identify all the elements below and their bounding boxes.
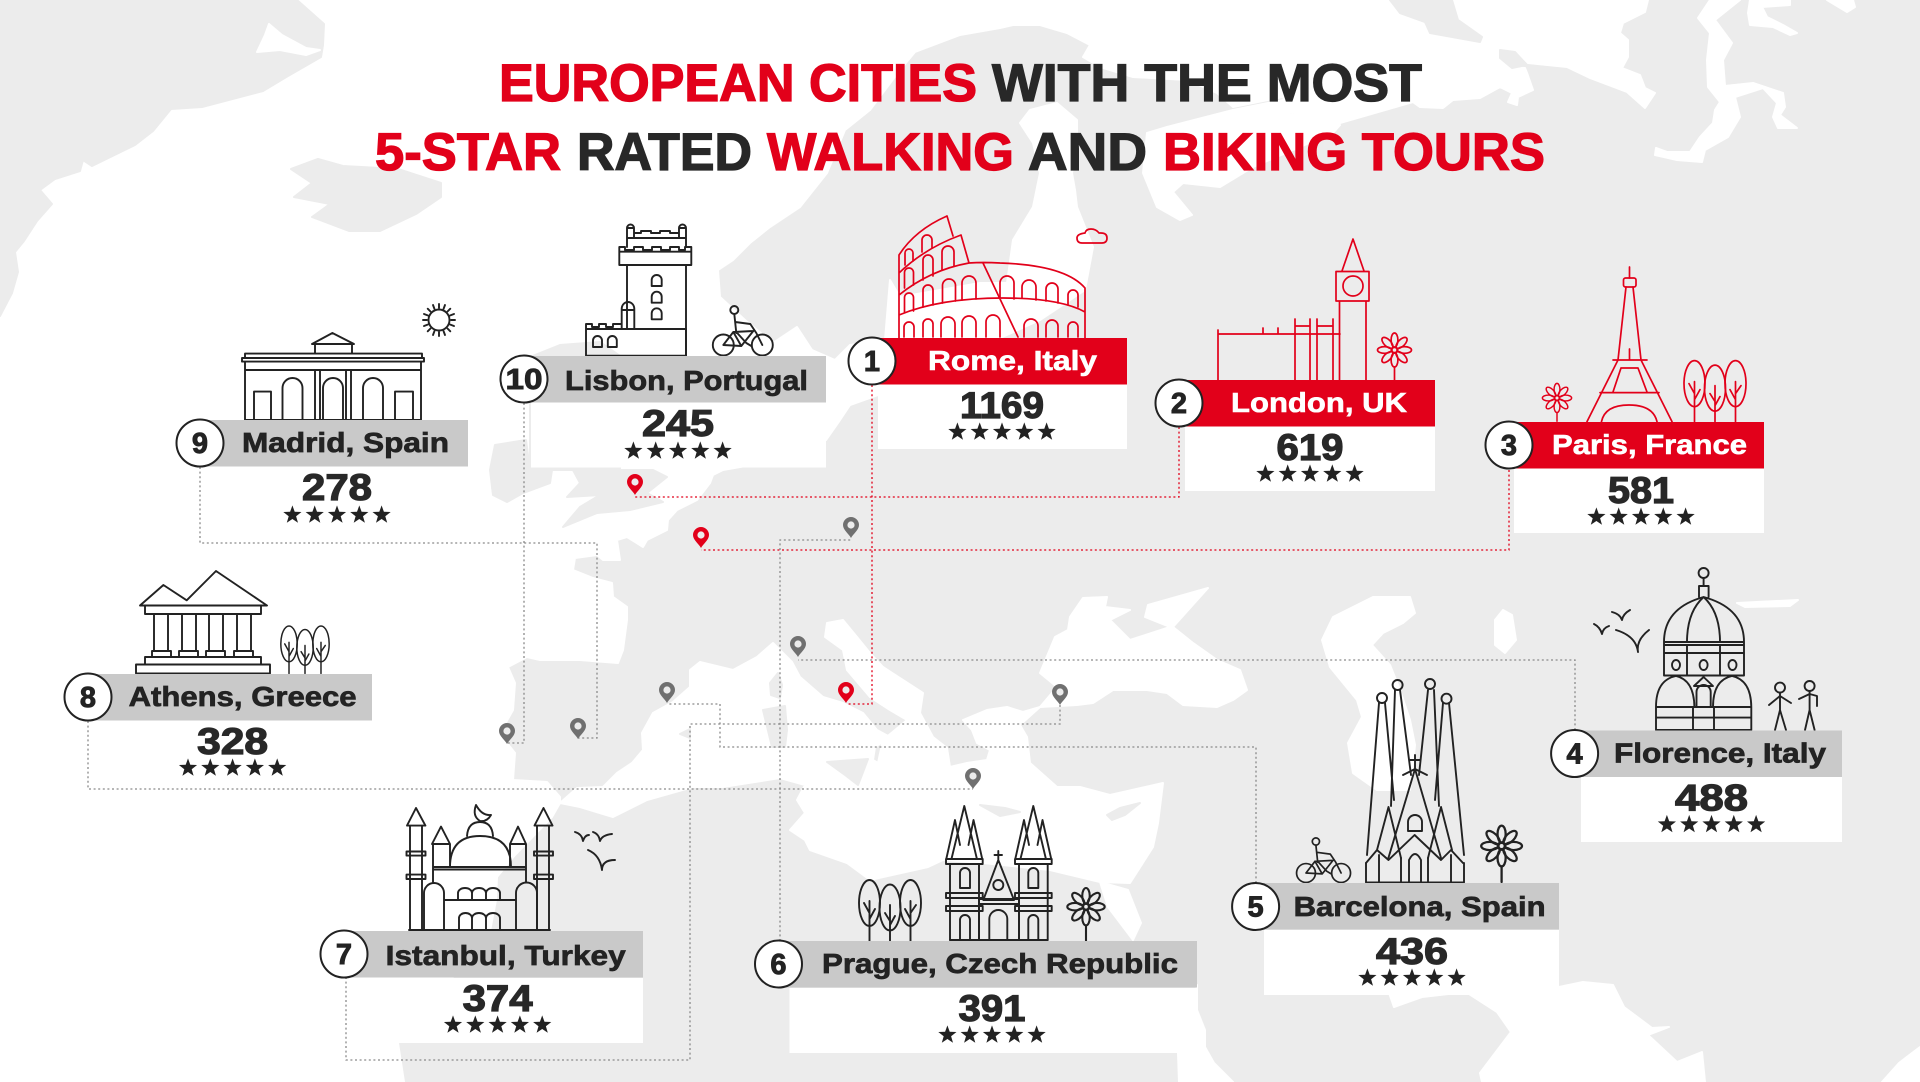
banner xyxy=(872,338,1127,384)
card: Prague xyxy=(755,940,1197,1053)
card: Florence xyxy=(1551,730,1842,842)
pin: london xyxy=(627,474,643,495)
connector: florence xyxy=(798,660,1575,730)
bay of bengal corner xyxy=(1882,1047,1920,1082)
card: Lisbon xyxy=(500,356,826,468)
rank badge xyxy=(500,356,548,402)
gulf of suez xyxy=(1100,882,1141,940)
banner xyxy=(344,931,643,978)
pin: prague xyxy=(843,517,859,538)
icon: birds xyxy=(575,832,615,870)
city label: Rome, Italy xyxy=(928,345,1097,376)
banner xyxy=(779,941,1197,988)
sardinia xyxy=(763,706,787,747)
rank badge: 9 xyxy=(192,428,208,460)
great britain xyxy=(530,342,667,527)
black sea xyxy=(1007,588,1247,725)
corsica xyxy=(770,673,782,698)
connector: rome xyxy=(846,385,872,704)
city label: Barcelona, Spain xyxy=(1294,891,1546,922)
icon: cloud xyxy=(1077,229,1107,243)
landmark: colosseum, Rome xyxy=(899,216,1107,338)
rank badge: 7 xyxy=(336,939,352,971)
star rating xyxy=(1587,507,1695,525)
card: Rome xyxy=(848,338,1127,449)
city label: Istanbul, Turkey xyxy=(386,940,626,971)
panel xyxy=(207,466,468,531)
balearic islands xyxy=(680,729,690,738)
rank badge: 8 xyxy=(80,682,96,714)
title: WALKING xyxy=(767,123,1014,182)
kolguev island xyxy=(1500,50,1527,68)
rank badge: 2 xyxy=(1171,388,1187,420)
landmark: Big Ben, London xyxy=(1218,239,1412,380)
connector: barcelona xyxy=(667,704,1256,883)
tour count: 278 xyxy=(302,467,372,508)
panel xyxy=(95,720,372,785)
title: EUROPEAN CITIES xyxy=(499,54,977,113)
star rating xyxy=(444,1015,551,1033)
rank badge: 1 xyxy=(864,346,880,378)
icon: bicycle xyxy=(713,306,773,356)
title: BIKING TOURS xyxy=(1163,123,1545,182)
red sea xyxy=(1178,985,1233,1082)
tour count: 581 xyxy=(1608,470,1674,511)
title: 5-STAR xyxy=(375,123,561,182)
connector: paris xyxy=(701,470,1509,550)
tour count: 245 xyxy=(642,403,714,444)
star rating xyxy=(938,1025,1046,1043)
sicily xyxy=(827,759,868,785)
panel xyxy=(1185,426,1435,491)
star rating xyxy=(1358,968,1466,986)
landmark: Puerta de Alcala, Madrid xyxy=(242,304,455,420)
connector: athens xyxy=(88,721,973,789)
connector: istanbul xyxy=(346,705,1060,1060)
icon: trees xyxy=(859,880,921,941)
pin: athens xyxy=(965,768,981,789)
crete xyxy=(980,805,1020,816)
rank badge xyxy=(1486,422,1532,468)
rank badge xyxy=(64,674,112,720)
star rating xyxy=(948,422,1056,440)
city label: Athens, Greece xyxy=(129,681,357,712)
icon: trees xyxy=(281,626,329,674)
novaya zemlya xyxy=(1390,0,1482,42)
pin: lisbon xyxy=(499,723,515,744)
tour count: 391 xyxy=(958,988,1026,1029)
icon: birds xyxy=(1594,610,1649,652)
city label: Lisbon, Portugal xyxy=(565,365,808,396)
title: AND xyxy=(1028,123,1147,182)
thin central asia lake xyxy=(1737,600,1798,607)
pin: istanbul xyxy=(1052,684,1068,705)
title: RATED xyxy=(577,123,752,182)
title: WITH THE MOST xyxy=(992,54,1422,113)
card: Madrid xyxy=(176,420,468,531)
rank badge: 6 xyxy=(770,949,787,981)
banner xyxy=(1575,730,1842,777)
banner xyxy=(1509,422,1764,468)
star rating xyxy=(283,505,391,523)
pin: madrid xyxy=(570,718,586,739)
pin: barcelona xyxy=(659,682,675,703)
landmark: Tyn Church, Prague xyxy=(859,806,1105,941)
landmark: Florence cathedral xyxy=(1594,568,1817,730)
panel xyxy=(1581,777,1842,842)
icon: flower xyxy=(1542,383,1572,421)
pin: florence xyxy=(790,636,806,657)
icon: flower xyxy=(1378,333,1412,380)
star rating xyxy=(179,758,286,776)
city label: London, UK xyxy=(1231,387,1407,418)
caspian sea xyxy=(1322,597,1415,790)
landmark: Belem Tower, Lisbon xyxy=(586,225,773,356)
icon: flower xyxy=(1481,826,1522,882)
tour count: 619 xyxy=(1276,427,1344,468)
cyprus xyxy=(1107,803,1140,820)
panel xyxy=(350,978,643,1043)
ireland xyxy=(490,440,552,502)
landmark: Parthenon, Athens xyxy=(136,571,329,674)
landmark: Eiffel Tower, Paris xyxy=(1542,267,1746,422)
tour count: 436 xyxy=(1376,931,1448,972)
rank badge: 4 xyxy=(1567,738,1583,770)
icon: flower xyxy=(1067,888,1105,941)
city label: Paris, France xyxy=(1552,429,1747,460)
star rating xyxy=(624,441,732,459)
connector: lisbon xyxy=(507,403,524,743)
mediterranean sea xyxy=(560,620,1163,883)
rank badge xyxy=(320,930,368,978)
rank badge: 3 xyxy=(1501,430,1517,462)
panel xyxy=(878,384,1127,449)
landmark: Sagrada Familia, Barcelona xyxy=(1297,679,1522,882)
city label: Florence, Italy xyxy=(1614,738,1826,768)
rank badge: 10 xyxy=(506,364,542,396)
city label: Madrid, Spain xyxy=(242,427,449,458)
panel xyxy=(531,402,826,468)
pin: rome xyxy=(838,682,854,703)
tour count: 374 xyxy=(463,978,533,1019)
aral sea xyxy=(1495,610,1516,653)
rank badge xyxy=(755,940,802,988)
map pins xyxy=(499,474,1068,789)
connector: prague xyxy=(780,540,851,941)
iceland xyxy=(291,159,441,231)
persian gulf and arabian sea xyxy=(1388,982,1705,1082)
title xyxy=(375,54,1545,182)
banner xyxy=(524,356,826,402)
gulf of ob xyxy=(1655,0,1797,162)
banner xyxy=(1256,883,1559,930)
banner xyxy=(88,674,372,720)
rank badge xyxy=(176,420,224,466)
tour count: 328 xyxy=(197,721,268,762)
icon: sun xyxy=(423,304,455,336)
panel xyxy=(790,988,1197,1053)
panel xyxy=(1514,468,1764,533)
landmark: mosque, Istanbul xyxy=(406,805,615,930)
city label: Prague, Czech Republic xyxy=(822,948,1178,979)
rank badge xyxy=(848,338,896,384)
card: Paris xyxy=(1486,422,1764,533)
siberian river one xyxy=(1748,0,1797,35)
banner xyxy=(200,420,468,466)
tour count: 488 xyxy=(1675,778,1748,818)
greenland xyxy=(0,0,324,316)
rank badge xyxy=(1232,883,1279,930)
card: London xyxy=(1156,380,1435,491)
rank badge: 5 xyxy=(1248,892,1264,924)
icon: trees xyxy=(1684,361,1746,422)
rank badge xyxy=(1551,730,1598,777)
star rating xyxy=(1256,464,1364,482)
rank badge xyxy=(1156,380,1202,426)
banner xyxy=(1179,380,1435,426)
pin: paris xyxy=(693,527,709,548)
icon: bicycle xyxy=(1297,838,1351,882)
connector: madrid xyxy=(200,467,597,738)
card: Barcelona xyxy=(1232,883,1559,995)
card: Athens xyxy=(64,674,372,785)
icon: people xyxy=(1769,681,1817,730)
white sea xyxy=(1143,100,1340,220)
connector: london xyxy=(635,427,1179,497)
star rating xyxy=(1658,815,1765,832)
siberian river two xyxy=(1827,0,1855,12)
card: Istanbul xyxy=(320,930,643,1043)
tour count: 1169 xyxy=(960,385,1044,426)
greenland inlet xyxy=(257,24,320,55)
panel xyxy=(1264,930,1559,995)
